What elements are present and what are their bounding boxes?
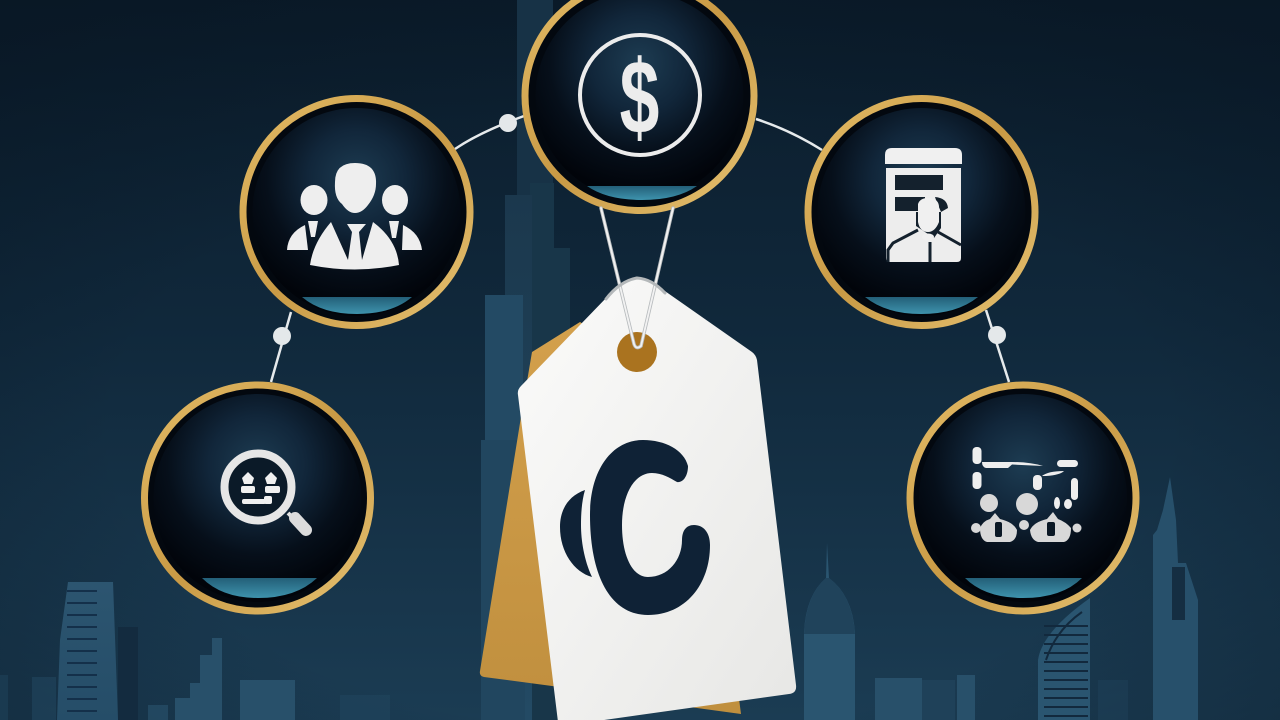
tag: white front bbox=[518, 278, 796, 720]
icon: magnifier bbox=[224, 454, 306, 530]
node: analysis bbox=[144, 385, 370, 611]
tag logo bbox=[560, 440, 710, 615]
node: profile bbox=[808, 98, 1035, 326]
skyline: left buildings bbox=[0, 582, 390, 720]
connector lines bbox=[271, 116, 1009, 382]
connector nodes bbox=[273, 114, 1006, 345]
tag eyelet bbox=[617, 332, 657, 372]
icon: dollar coin: $ bbox=[620, 39, 659, 156]
node: team bbox=[243, 98, 470, 326]
skyline: right buildings bbox=[804, 477, 1198, 720]
price tags bbox=[480, 208, 796, 720]
skyline: central tower bbox=[481, 0, 570, 720]
icon: business people bbox=[287, 163, 422, 270]
node: price bbox=[525, 0, 754, 210]
icon: connected people bbox=[971, 447, 1082, 542]
icon: dollar coin bbox=[580, 35, 700, 156]
tag: back gold bbox=[480, 322, 741, 714]
node: network bbox=[910, 385, 1136, 611]
string loop bbox=[601, 208, 673, 348]
icon: id document bbox=[885, 148, 962, 262]
